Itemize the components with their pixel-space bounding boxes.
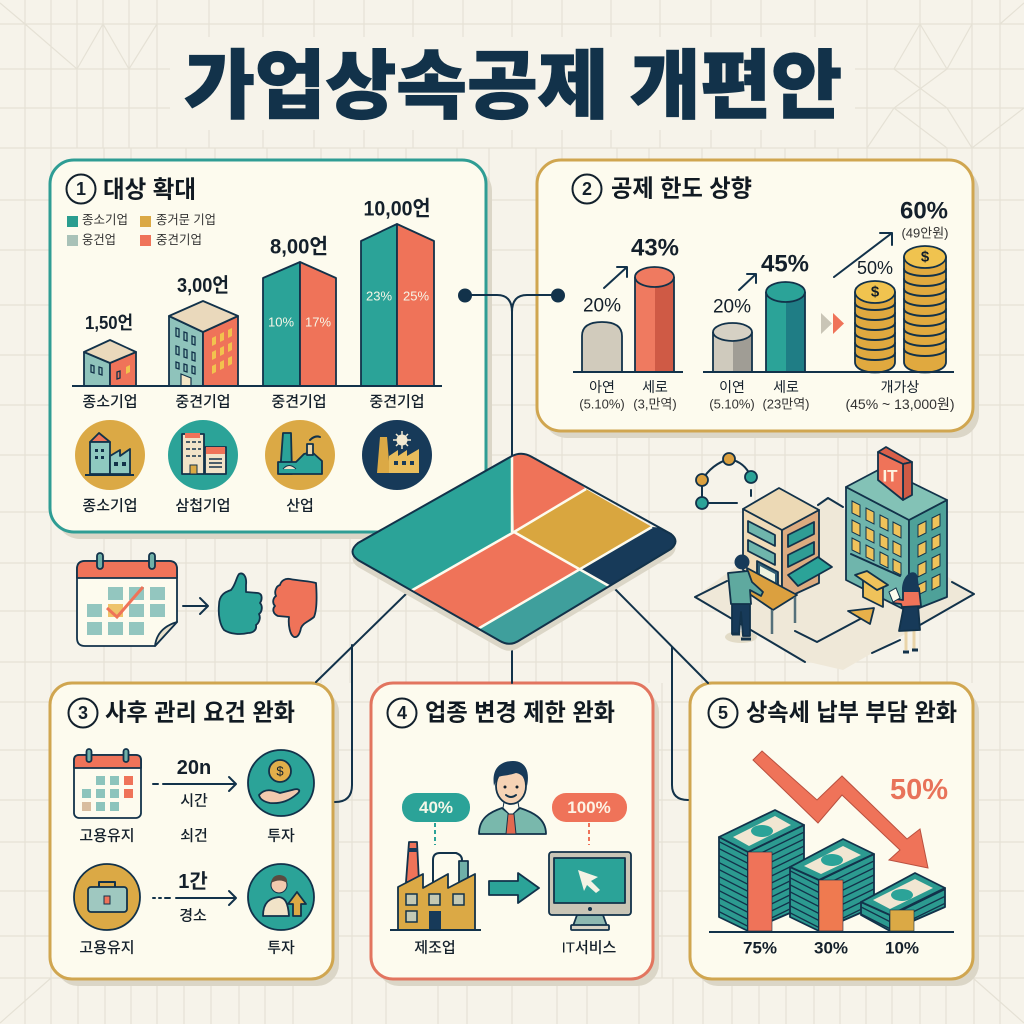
heading: 3 [78,703,88,723]
building bar 3: 17% [305,314,331,330]
icon: hand with coin: $ [276,764,284,778]
building bar 4: 10,00언 [364,198,430,220]
money stack 2 [790,839,874,931]
bar labels [82,394,425,410]
icon labels [82,498,314,514]
heading: 5 [718,703,728,723]
icon: small business [75,420,145,490]
building bar 2 [169,274,238,386]
building bar 3 [263,236,336,386]
building bar 3: 10% [268,314,294,330]
heading: 공제 한도 상향: 공제 한도 상향 [611,176,752,202]
building bar 2: 3,00언 [177,274,229,297]
heading: 상속세 납부 부담 완화 [746,700,957,726]
building bar 1: 1,50언 [85,313,133,333]
labels: 제조업 [414,940,456,956]
legend: 웅건업 [82,233,116,247]
chart labels: 세로 [773,379,799,395]
heading: 업종 변경 제한 완화 [425,700,615,726]
legend: 중견기업 [156,233,202,247]
money stack 3 [861,873,945,931]
legend: 종소기업 [82,213,128,227]
percentage labels: 75% [743,938,777,958]
coin stack small: $ [871,284,880,300]
chart labels: 아연 [589,379,615,395]
pill: 100%: 100% [567,798,611,817]
row 1 labels [79,828,295,844]
arrow: transition [795,608,874,642]
chart labels: (3,만역) [633,396,677,412]
arrow with labels row 1 [153,757,236,844]
cylinder chart 1: 43% [631,234,679,262]
labels: IT서비스 [562,940,617,956]
chart labels: 개가상 [881,379,919,395]
chart labels [579,379,955,412]
person at desk [725,554,797,643]
coin stack large: $ [921,248,930,266]
icon: thumb up [219,573,262,634]
arrow with labels row 1: 시간 [180,792,208,810]
coin stack small [855,258,895,372]
icon: mid enterprise [168,420,238,490]
person with papers [889,572,921,652]
chart labels: (23만역) [762,396,810,412]
ground [695,498,974,670]
building bar 3: 8,00언 [270,236,328,258]
icon: briefcase [74,864,140,930]
heading: 대상 확대: 1 [76,179,86,199]
row 2 labels [79,940,295,956]
IT sign: IT [882,466,898,486]
network icon [696,453,757,509]
panel: 대상 확대 [50,160,492,539]
connector lines [316,290,708,802]
bar labels: 중견기업 [369,394,425,410]
callout: 50%: 50% [890,774,948,806]
panel: 업종 변경 제한 완화 [371,683,659,986]
chart labels: (45% ~ 13,000원) [845,396,955,412]
heading: 4 [397,703,407,723]
percentage labels: 10% [885,938,919,958]
pill: 100% [552,793,627,845]
row 1 labels: 투자 [267,828,295,844]
coin stack large: (49안원) [901,226,949,240]
icon: factory [390,842,481,930]
arrow: growth [834,233,892,277]
heading: 대상 확대: 대상 확대 [103,176,196,204]
cylinder chart 1 [582,234,679,372]
arrow [183,598,208,614]
cylinder chart 2 [713,250,809,372]
icon: industry [265,420,335,490]
icon labels: 삼첩기업 [175,498,231,514]
coin stack large [900,198,949,372]
percentage labels [743,938,919,958]
diamond centerpiece [340,450,690,651]
building A [743,488,832,600]
arrow with labels row 2 [153,870,236,924]
coin stack large: 60% [900,198,948,224]
icon: hand with coin [248,750,314,816]
chart labels: (5.10%) [579,396,625,412]
icon: thumb down [273,579,317,637]
panel: 사후 관리 요건 완화 [50,683,339,986]
icon: calendar [74,749,141,818]
building bar 1 [84,313,136,386]
IT sign [878,447,912,500]
row 2 labels: 고용유지 [79,940,135,956]
row 2 labels: 투자 [267,940,295,956]
pill: 40%: 40% [419,798,453,817]
coin stack small: 50% [857,258,893,278]
heading: 대상 확대 [66,174,196,204]
chart labels: (5.10%) [709,396,755,412]
cylinder chart 2: 20% [713,296,751,318]
building bar 4: 25% [403,288,429,304]
percentage labels: 30% [814,938,848,958]
icon: factory navy [362,420,432,490]
pill: 40% [402,793,470,845]
building B [846,468,947,612]
bar labels: 중견기업 [271,394,327,410]
arrow with labels row 1: 쇠건 [180,828,208,844]
labels [414,940,617,956]
arrow with labels row 2: 경소 [179,908,207,924]
cylinder chart 2: 45% [761,250,809,278]
legend [67,213,216,247]
arrow: falling [753,751,928,868]
heading: 공제 한도 상향: 2 [582,179,592,199]
chart labels: 이연 [719,379,745,395]
legend: 종거문 기업 [156,213,216,227]
bar labels: 중견기업 [175,394,231,410]
bar labels: 종소기업 [82,394,138,410]
icon: businessman with arrow [248,864,314,930]
icon: person [479,761,546,834]
icon labels: 종소기업 [82,498,138,514]
icon: double triangles [821,313,844,334]
building bar 4: 23% [366,288,392,304]
money stack 1 [719,810,804,931]
arrow: teal [489,873,539,903]
heading: 사후 관리 요건 완화 [105,700,295,726]
arrow with labels row 2: 1간 [178,870,208,893]
building bar 4 [361,198,434,386]
icon labels: 산업 [286,498,314,514]
panel: 공제 한도 상향 [537,160,979,438]
arrow with labels row 1: 20n [177,757,211,779]
title: 가업상속공제 개편안 [184,44,842,128]
isometric scene [695,447,974,670]
icon: calendar with check [77,553,177,646]
chart labels: 세로 [642,379,668,395]
row 1 labels: 고용유지 [79,828,135,844]
icon: monitor [549,852,631,930]
cylinder chart 1: 20% [583,296,621,316]
panel: 상속세 납부 부담 완화 [690,683,979,986]
